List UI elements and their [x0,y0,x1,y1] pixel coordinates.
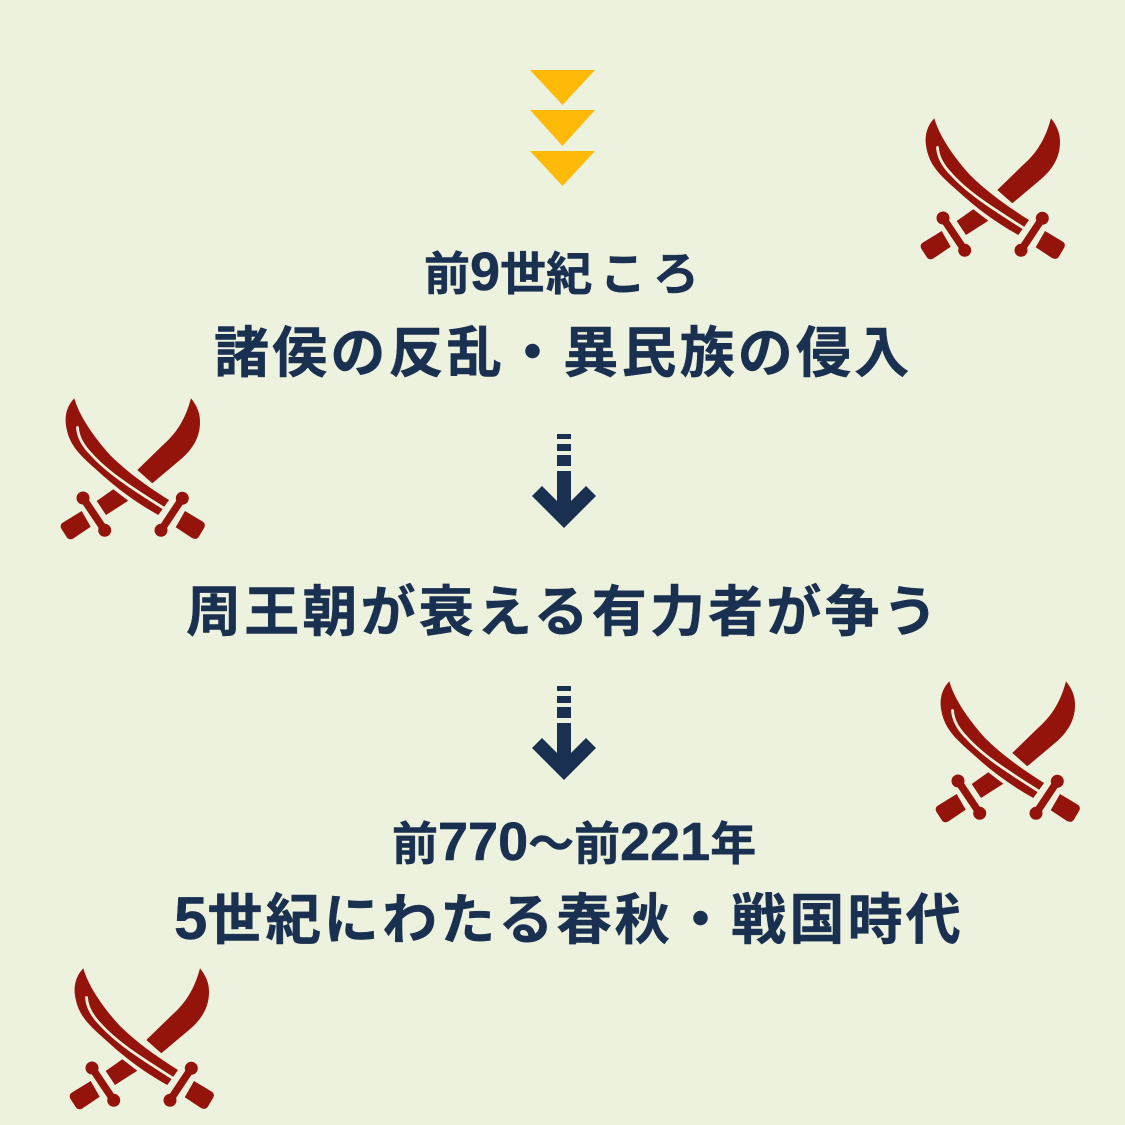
arrow: first down arrow [532,434,596,528]
icon: crossed swords bottom left [70,968,214,1110]
heading: Spring and Autumn and Warring States: 5世紀にわたる春秋・戦国時代 [174,885,964,952]
icon: triple down chevrons [530,70,595,186]
heading: decline of Zhou: 周王朝が衰える有力者が争う [186,581,941,643]
arrow: second down arrow [532,686,596,780]
date label: 770 to 221 BC: 前770〜前221年 [392,812,756,872]
heading: revolts and invasions: 諸侯の反乱・異民族の侵入 [214,322,912,384]
icon: crossed swords lower right [936,681,1080,822]
icon: crossed swords top right [920,118,1065,260]
icon: crossed swords upper left [60,398,205,540]
date label: 9th century BC: 前9世紀ころ [424,242,699,302]
